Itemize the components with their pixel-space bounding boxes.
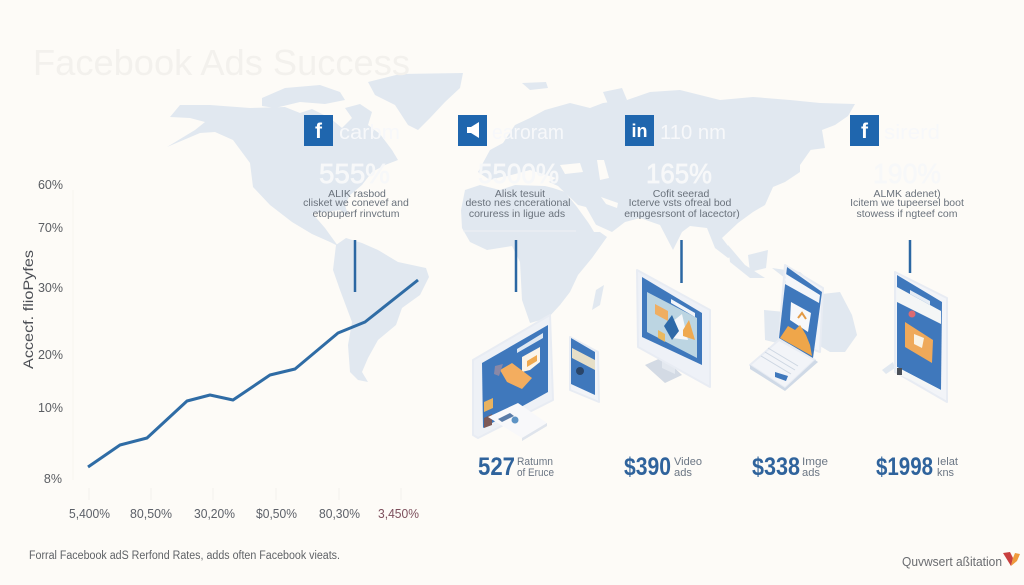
- x axis labels: $0,50%: [256, 507, 297, 521]
- stat: image ads: ads: [802, 467, 820, 479]
- footnote: Forral Facebook adS Rerfond Rates, adds often Facebook vieats.: [29, 550, 340, 562]
- stat: return: [478, 453, 554, 481]
- column 1 heading: carbm: [339, 122, 400, 144]
- x axis labels: 80,30%: [319, 507, 360, 521]
- stat: return: Ratumn: [517, 456, 553, 468]
- column 1 description: ALIK rasbod: [328, 188, 386, 200]
- device: tablet: [895, 272, 947, 402]
- column 1 description: [303, 188, 409, 220]
- stat: other: kns: [937, 467, 954, 479]
- icon: linkedin: [625, 115, 654, 146]
- column 2 description: coruress in ligue ads: [469, 208, 565, 220]
- column 3 heading: 110 nm: [660, 122, 726, 144]
- device: phone: [570, 337, 599, 402]
- y axis labels: 30%: [38, 281, 63, 295]
- column 2 percentage: 5500%: [478, 158, 559, 189]
- stat: video ads: $390: [624, 453, 671, 481]
- icon: brand heart: [1003, 552, 1020, 566]
- column 3 description: Cofit seerad: [653, 188, 709, 200]
- column 1 description: clisket we conevef and: [303, 197, 409, 209]
- x axis labels: 80,50%: [130, 507, 172, 521]
- column 4 description: Icitem we tupeersel boot: [850, 197, 964, 209]
- column 2 description: Alisk tesuit: [495, 188, 545, 200]
- device: foldable laptop: [750, 265, 823, 391]
- icon: facebook: f: [315, 120, 323, 143]
- stat: other: $1998: [876, 453, 933, 481]
- column 3 description: empgesrsont of lacector): [624, 208, 740, 220]
- column 2 description: [465, 188, 571, 220]
- device: monitor with handshake: [473, 315, 553, 441]
- icon: facebook: [850, 115, 879, 146]
- stat: other: Ielat: [937, 456, 958, 468]
- y axis labels: 10%: [38, 401, 63, 415]
- icon: facebook: f: [861, 120, 869, 143]
- stat: return: of Eruce: [517, 467, 554, 479]
- column 3 connector: [680, 240, 683, 283]
- x axis labels: 30,20%: [194, 507, 235, 521]
- stat: video ads: ads: [674, 467, 692, 479]
- y axis labels: 60%: [38, 178, 63, 192]
- column 1 description: etopuperf rinvctum: [313, 208, 400, 220]
- column 4 connector: [909, 240, 911, 273]
- y axis labels: 70%: [38, 221, 63, 235]
- title: Facebook Ads Success: [33, 42, 410, 83]
- y axis title: Accecf. flioPyfes: [20, 250, 36, 369]
- column 1 percentage: 555%: [319, 158, 390, 189]
- column 4 description: [850, 188, 964, 220]
- column 2 description: desto nes cncerational: [465, 197, 571, 209]
- device: desktop monitor: [637, 270, 710, 387]
- stat: return: 527: [478, 453, 515, 481]
- icon: linkedin: in: [632, 121, 648, 141]
- trend line: [88, 280, 418, 467]
- panel: column 3: [624, 115, 740, 283]
- column 3 description: Icterve vsts ofreal bod: [629, 197, 732, 209]
- y axis labels: 20%: [38, 348, 63, 362]
- column 4 heading: sirerd: [884, 122, 940, 144]
- panel: column 4: [850, 115, 964, 273]
- stat: image ads: $338: [752, 453, 800, 481]
- column 4 description: ALMK adenet): [873, 188, 941, 200]
- panel: column 2: [458, 115, 576, 292]
- column 2 heading: earoram: [492, 122, 564, 144]
- y axis labels: 8%: [44, 472, 62, 486]
- world map background: [167, 73, 895, 382]
- x axis labels: [69, 507, 419, 521]
- map water cut-outs: [500, 160, 618, 232]
- line chart: [38, 178, 419, 521]
- panel: column 1: [303, 115, 409, 292]
- x axis labels: 5,400%: [69, 507, 110, 521]
- stat: image ads: Imge: [802, 456, 828, 468]
- stat: video ads: Video: [674, 456, 702, 468]
- column 1 connector: [354, 240, 356, 292]
- column 3 description: [624, 188, 740, 220]
- brand name: Quvwsert aßitation: [902, 555, 1002, 569]
- icon: megaphone: [458, 115, 487, 146]
- column 3 percentage: 165%: [646, 158, 712, 189]
- icon: facebook: [304, 115, 333, 146]
- column 4 description: stowess if ngteef com: [857, 208, 958, 220]
- column 4 percentage: 190%: [873, 158, 941, 189]
- x axis labels: 3,450%: [378, 507, 419, 521]
- y axis labels: [38, 178, 63, 486]
- column 2 connector: [515, 240, 517, 292]
